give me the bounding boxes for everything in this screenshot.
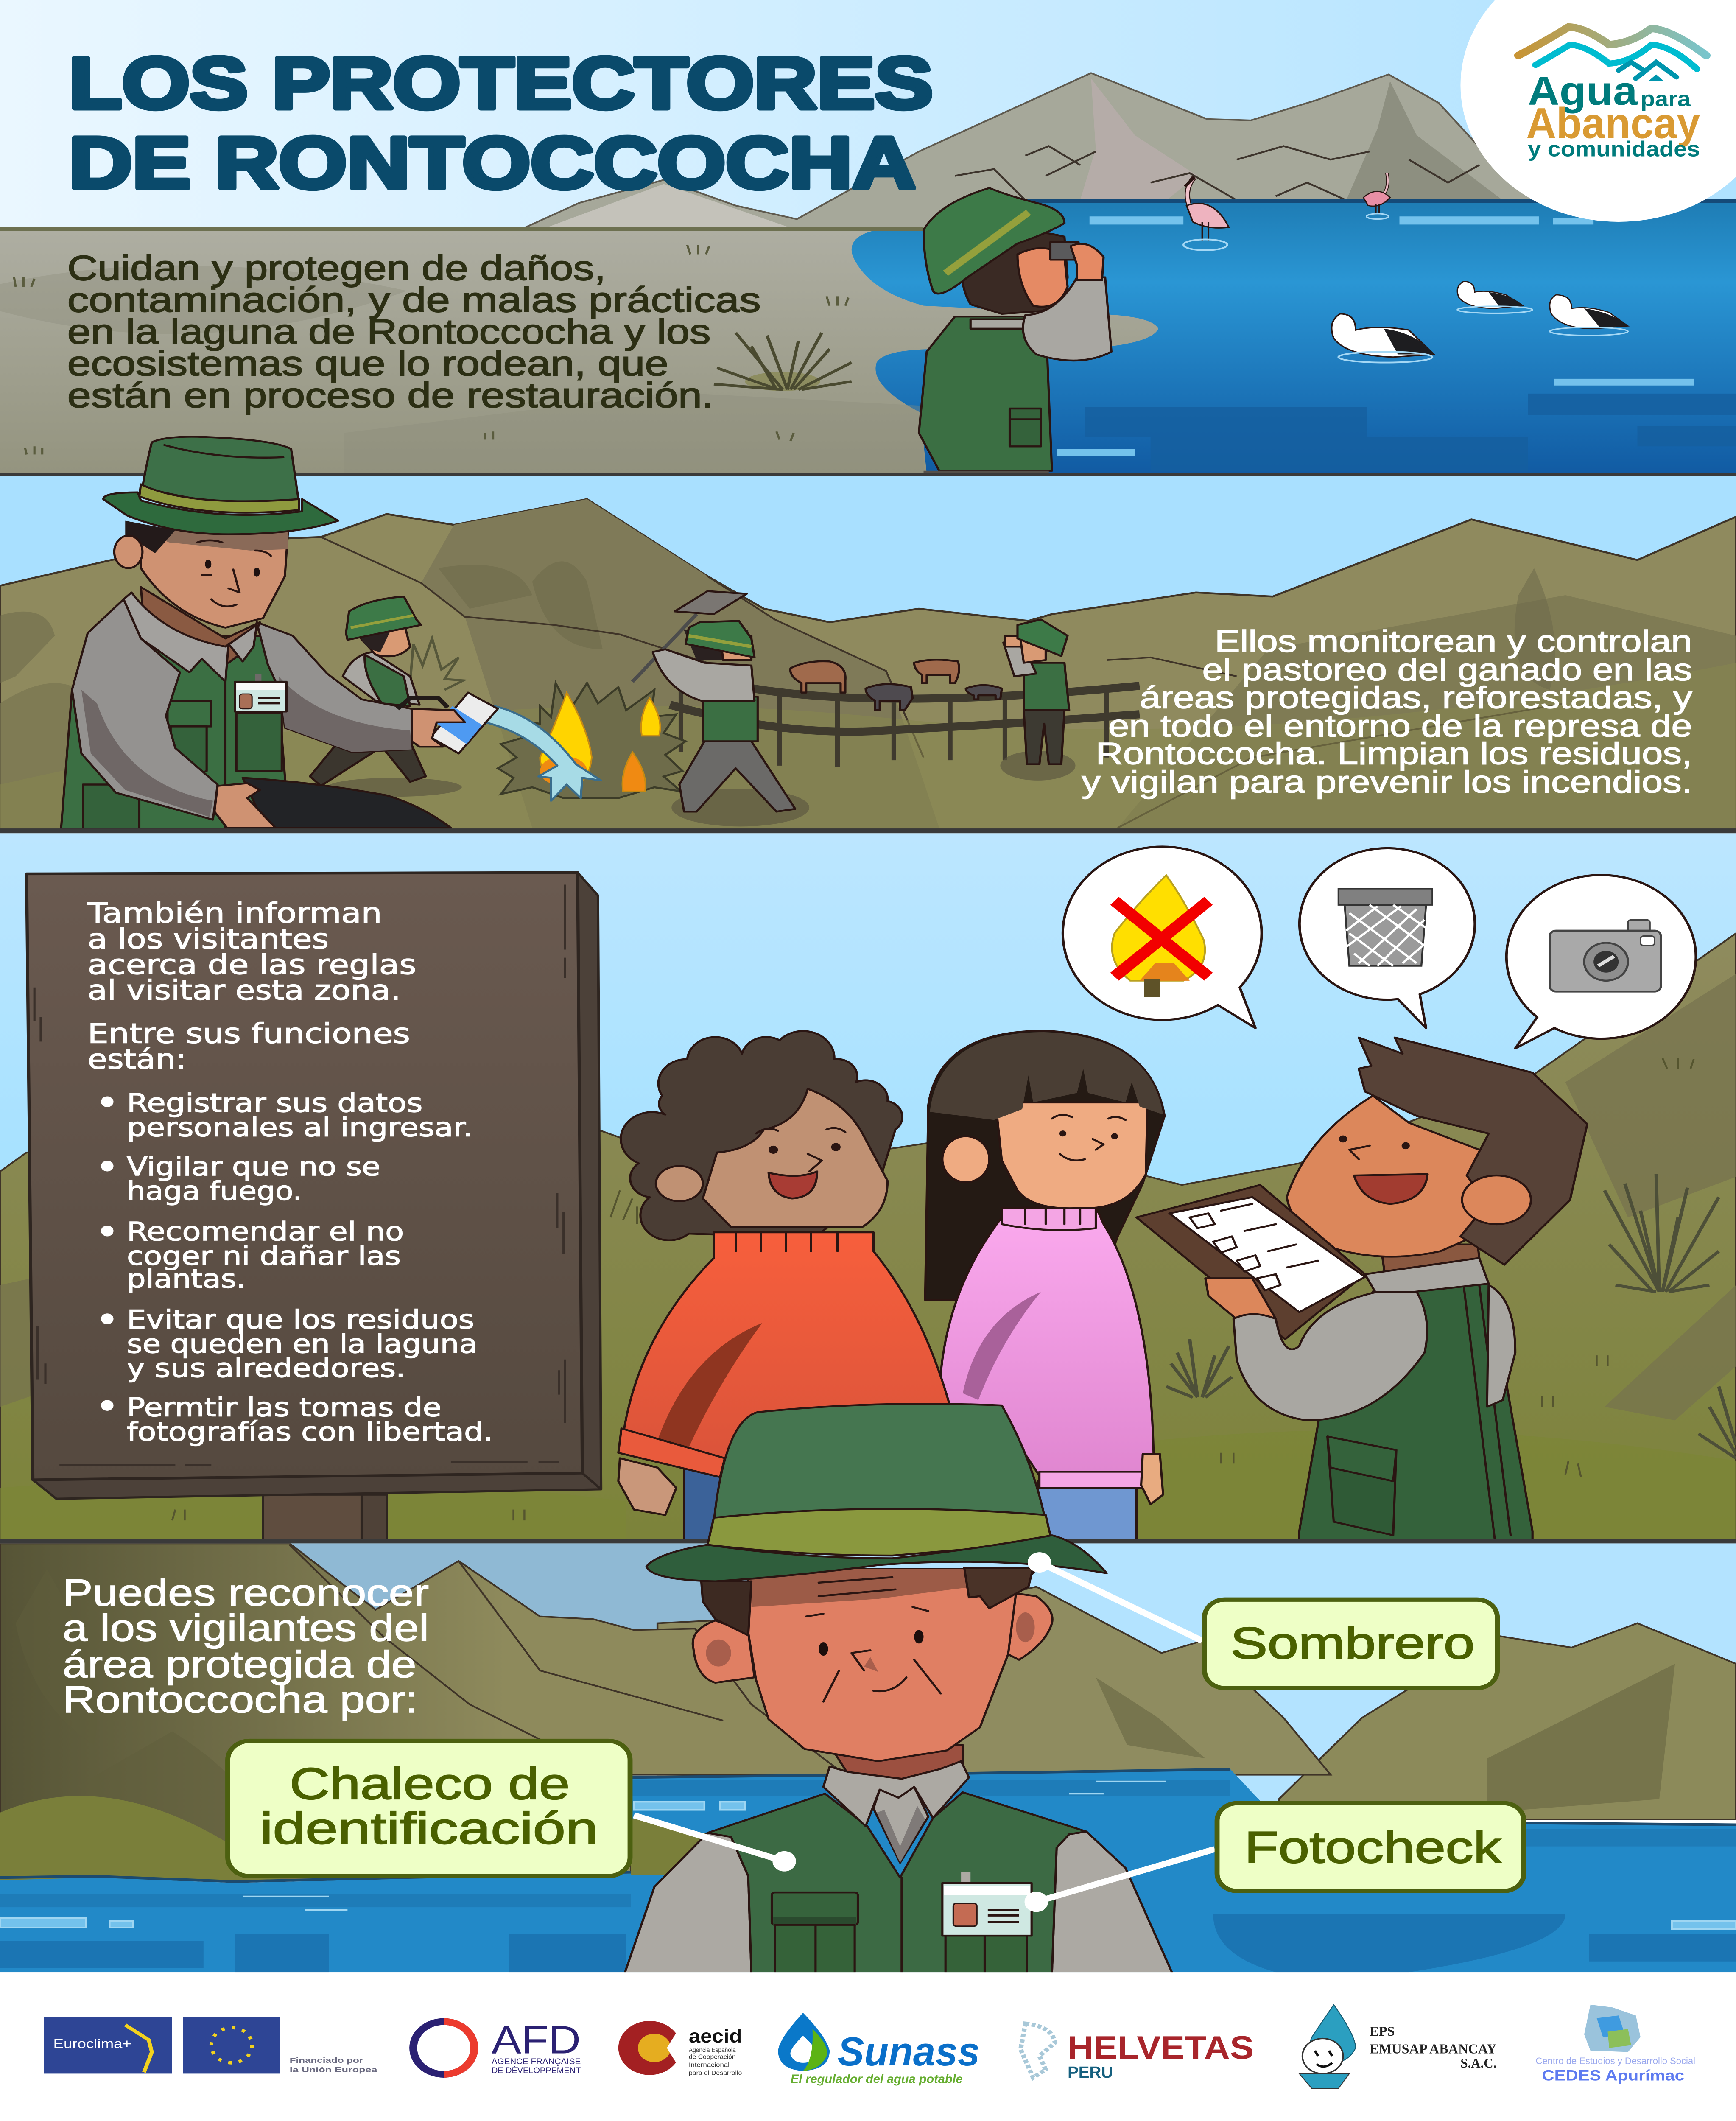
fence bbox=[670, 686, 1140, 767]
logo: Agua para Abancay: para bbox=[1641, 87, 1691, 111]
leader lines bbox=[634, 1552, 1215, 1912]
callout: Fotocheck bbox=[1217, 1803, 1524, 1891]
text block: monitoring bbox=[1082, 624, 1692, 799]
small ranger at left bbox=[310, 596, 426, 786]
logo: Agua para Abancay: y comunidades bbox=[1528, 137, 1700, 161]
callout: Chaleco de identificación: Chaleco de bbox=[290, 1759, 570, 1809]
text block: monitoring: Rontoccocha. Limpian los residuos, bbox=[1096, 736, 1692, 771]
sky bbox=[0, 833, 1736, 1374]
hat bbox=[103, 437, 338, 534]
heading: title: LOS PROTECTORES bbox=[69, 42, 933, 124]
logo: Helvetas: PERU bbox=[1068, 2063, 1113, 2081]
list: ranger functions: coger ni dañar las bbox=[127, 1241, 401, 1271]
badge bbox=[235, 674, 286, 711]
ranger with clipboard bbox=[1136, 1038, 1587, 1541]
speech bubble: camera bbox=[1507, 875, 1696, 1048]
girl in pink sweater bbox=[925, 1031, 1165, 1542]
text block: sign rules: a los visitantes bbox=[88, 923, 329, 955]
speech bubble: trash bin bbox=[1300, 848, 1475, 1028]
divider bbox=[0, 828, 1736, 833]
list: ranger functions: personales al ingresar. bbox=[127, 1113, 473, 1142]
hat bbox=[646, 1404, 1107, 1581]
neck bbox=[141, 587, 260, 663]
text block: intro: ecosistemas que lo rodean, que bbox=[67, 344, 668, 383]
text: financed by bbox=[290, 2057, 377, 2074]
text block: sign rules: Entre sus funciones bbox=[88, 1018, 410, 1049]
main ranger bbox=[625, 1404, 1172, 1973]
neck bbox=[830, 1745, 963, 1792]
panel: sign board bbox=[27, 873, 601, 1499]
logo: Euroclima: Euroclima+ bbox=[53, 2036, 131, 2051]
sky bbox=[0, 0, 1736, 230]
logo: EMUSAP mascot bbox=[1299, 2005, 1496, 2088]
logo: aecid: Agencia Española bbox=[689, 2047, 736, 2054]
callout: Chaleco de identificación bbox=[228, 1741, 630, 1876]
hand and garbage bag bbox=[215, 778, 451, 828]
divider bbox=[0, 1539, 1736, 1543]
callout: Sombrero bbox=[1205, 1600, 1497, 1688]
ground with description text background bbox=[0, 230, 1158, 473]
lake water bbox=[845, 200, 1736, 473]
text block: recognize: Puedes reconocer bbox=[63, 1572, 429, 1614]
text: financed by: la Unión Europea bbox=[290, 2066, 377, 2074]
hand and bottle bbox=[397, 693, 498, 753]
logo: AFD: DE DÉVELOPPEMENT bbox=[492, 2066, 581, 2075]
callout: Sombrero: Sombrero bbox=[1230, 1618, 1475, 1668]
logo: Sunass bbox=[778, 2013, 980, 2086]
shadows bbox=[327, 751, 1076, 826]
big ranger with water bottle bbox=[61, 437, 498, 829]
text block: sign rules: También informan bbox=[87, 898, 382, 929]
face bbox=[114, 521, 288, 628]
text block: sign rules bbox=[87, 898, 417, 1075]
logo: Sunass: El regulador del agua potable bbox=[791, 2072, 963, 2086]
text block: recognize: Rontoccocha por: bbox=[63, 1679, 418, 1721]
list: ranger functions: Registrar sus datos bbox=[127, 1088, 422, 1118]
head bbox=[701, 1568, 1036, 1761]
logo: AFD: AFD bbox=[492, 2018, 581, 2062]
logo: Agua para Abancay: Agua bbox=[1528, 68, 1638, 113]
text block: monitoring: Ellos monitorean y controlan bbox=[1215, 624, 1692, 659]
logo: aecid: aecid bbox=[689, 2026, 742, 2047]
flamingo large bbox=[1183, 177, 1229, 250]
text block: intro: Cuidan y protegen de daños, bbox=[67, 249, 606, 288]
hills and ground bbox=[0, 933, 1736, 1541]
panel: monitoring bbox=[0, 476, 1736, 831]
sky bbox=[0, 476, 1736, 831]
text block: intro: en la laguna de Rontoccocha y los bbox=[67, 312, 711, 351]
duck middle bbox=[1457, 281, 1532, 313]
text: financed by: Financiado por bbox=[290, 2057, 363, 2065]
mountains bbox=[0, 499, 1736, 829]
text block: recognize bbox=[63, 1572, 429, 1721]
text block: recognize: área protegida de bbox=[63, 1644, 417, 1685]
list: ranger functions: Permtir las tomas de bbox=[127, 1393, 442, 1422]
panel: how to recognize bbox=[0, 1543, 1736, 1972]
fire bbox=[498, 683, 686, 798]
ranger with binoculars bbox=[919, 188, 1111, 473]
text block: sign rules: están: bbox=[88, 1044, 186, 1075]
collar bbox=[124, 593, 257, 682]
water highlights and shadows bbox=[1057, 216, 1736, 471]
text block: monitoring: el pastoreo del ganado en las bbox=[1202, 652, 1692, 687]
text block: monitoring: áreas protegidas, reforestadas, y bbox=[1140, 680, 1692, 715]
duck right bbox=[1550, 295, 1628, 336]
sky bbox=[0, 1543, 1736, 1814]
mountains bbox=[0, 1543, 1736, 1880]
logo: Euroclima bbox=[44, 2017, 172, 2073]
footer: sponsor logos bbox=[0, 1972, 1736, 2121]
text block: monitoring: y vigilan para prevenir los incendios. bbox=[1082, 764, 1692, 799]
divider bbox=[0, 473, 1736, 477]
logo: AFD: AGENCE FRANÇAISE bbox=[492, 2057, 581, 2066]
text block: sign rules: al visitar esta zona. bbox=[88, 975, 401, 1006]
text block: recognize: a los vigilantes del bbox=[63, 1607, 429, 1649]
logo: EMUSAP mascot: EPS bbox=[1370, 2024, 1395, 2039]
list: ranger functions: Recomendar el no bbox=[127, 1217, 404, 1247]
grass tufts bbox=[14, 245, 848, 454]
fotocheck badge bbox=[942, 1872, 1032, 1936]
logo: EMUSAP mascot: S.A.C. bbox=[1460, 2056, 1496, 2071]
boy in red sweater bbox=[618, 1031, 950, 1542]
logo: Sunass: Sunass bbox=[838, 2029, 980, 2074]
collar bbox=[823, 1761, 969, 1863]
list: ranger functions: fotografías con libertad. bbox=[127, 1417, 493, 1447]
ears bbox=[693, 1593, 1052, 1683]
water stream bbox=[485, 706, 601, 801]
text block: intro: están en proceso de restauración. bbox=[67, 376, 714, 415]
logo: CEDES Apurimac: CEDES Apurímac bbox=[1542, 2068, 1684, 2084]
logo: CEDES Apurimac: Centro de Estudios y Desarrollo Social bbox=[1536, 2056, 1695, 2067]
speech bubble: no fire bbox=[1063, 847, 1262, 1028]
logo: CEDES Apurimac bbox=[1536, 2005, 1695, 2084]
logo: aecid bbox=[618, 2021, 742, 2076]
list: ranger functions: se queden en la laguna bbox=[127, 1329, 478, 1359]
logo: Agua para Abancay: Abancay bbox=[1526, 99, 1700, 147]
logo: Agua para Abancay bbox=[1460, 0, 1736, 222]
list: ranger functions: y sus alrededores. bbox=[127, 1354, 405, 1383]
logo: Helvetas: HELVETAS bbox=[1068, 2029, 1254, 2066]
lake water bbox=[0, 1769, 1736, 1972]
logo: aecid: Internacional bbox=[689, 2062, 730, 2068]
ground bbox=[0, 663, 1736, 829]
heading: title bbox=[69, 42, 933, 204]
callout: Chaleco de identificación: identificación bbox=[260, 1804, 598, 1853]
text block: intro: contaminación, y de malas prácticas bbox=[67, 280, 761, 320]
logo: AFD bbox=[413, 2018, 581, 2075]
ranger with hoe bbox=[632, 591, 795, 811]
icon: plant bbox=[714, 333, 852, 391]
logo: aecid: de Cooperación bbox=[689, 2054, 736, 2060]
text block: monitoring: en todo el entorno de la represa de bbox=[1108, 708, 1692, 743]
text block: intro bbox=[67, 249, 761, 415]
list: ranger functions bbox=[101, 1088, 493, 1447]
callout: Fotocheck: Fotocheck bbox=[1244, 1823, 1502, 1872]
list: ranger functions: haga fuego. bbox=[127, 1176, 302, 1206]
left sleeve bbox=[72, 599, 218, 820]
logo: aecid: para el Desarrollo bbox=[689, 2070, 742, 2076]
vest bbox=[707, 1792, 1086, 1973]
text block: sign rules: acerca de las reglas bbox=[88, 949, 417, 981]
panel: lake intro bbox=[0, 0, 1736, 473]
panel: visitors bbox=[0, 833, 1736, 1542]
logo: European Union flag bbox=[183, 2017, 280, 2073]
icon: plants bbox=[1166, 1174, 1736, 1458]
sign post bbox=[263, 1495, 387, 1542]
duck large bbox=[1332, 314, 1434, 363]
list: ranger functions: Evitar que los residuos bbox=[127, 1305, 474, 1335]
ranger at fence bbox=[1004, 619, 1069, 764]
cows bbox=[790, 660, 1002, 710]
right sleeve bbox=[257, 622, 412, 752]
list: ranger functions: plantas. bbox=[127, 1264, 246, 1294]
logo: Helvetas bbox=[1020, 2023, 1254, 2081]
bush behind small ranger bbox=[410, 638, 463, 690]
heading: title: DE RONTOCCOCHA bbox=[69, 122, 916, 204]
flamingo small bbox=[1364, 173, 1390, 219]
vest bbox=[61, 636, 288, 829]
mountains in the background bbox=[520, 73, 1565, 230]
list: ranger functions: Vigilar que no se bbox=[127, 1152, 380, 1182]
logo: EMUSAP mascot: EMUSAP ABANCAY bbox=[1370, 2042, 1496, 2057]
shoulders bbox=[625, 1832, 1172, 1973]
